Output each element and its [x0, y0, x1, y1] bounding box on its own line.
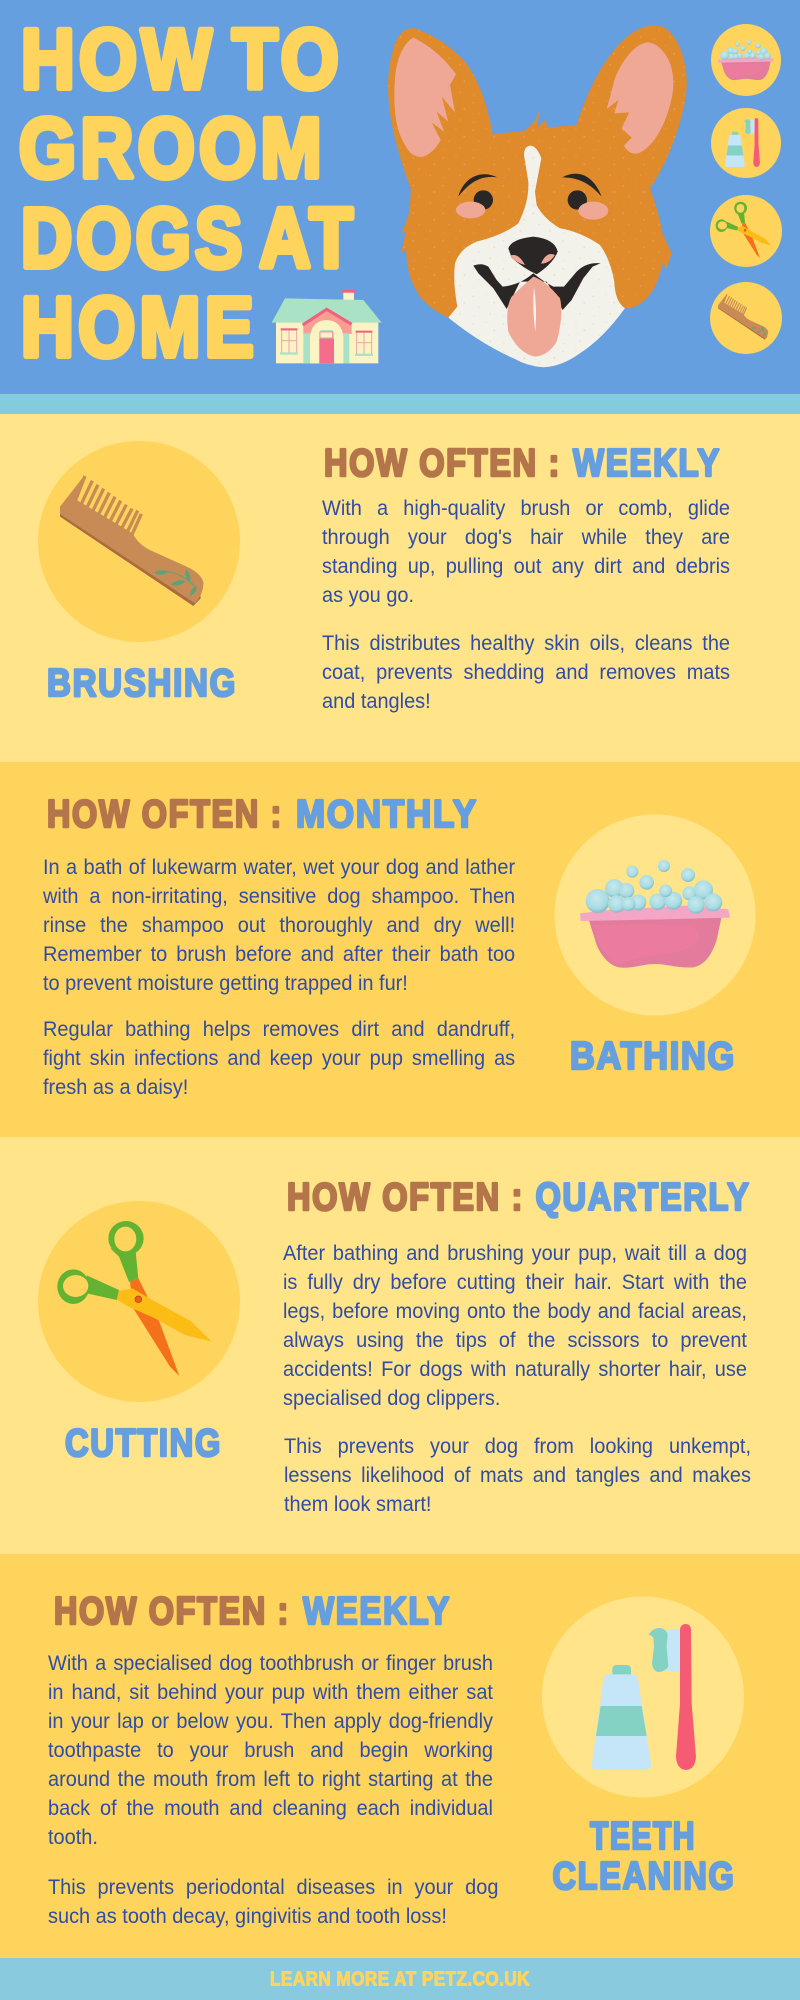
text: brushing body: standing up, pulling out any dirt and debris: [322, 555, 730, 578]
text: cutting body: This prevents your dog from looking unkempt,: [284, 1435, 751, 1458]
heading: how often monthly: MONTHLY: [296, 793, 478, 836]
text: brushing body: This distributes healthy skin oils, cleans the: [322, 632, 730, 655]
header panel: [0, 0, 800, 395]
icon: house: [272, 290, 382, 363]
text: cutting body: [283, 1239, 777, 1522]
text: cutting body: is fully dry before cutting their hair. Start with the: [283, 1271, 747, 1294]
text: brushing body: and tangles!: [322, 690, 430, 713]
panel: brushing: [0, 414, 800, 762]
text: bathing body: fight skin infections and keep your pup smelling as: [42, 1047, 515, 1070]
dog nose: [508, 237, 558, 274]
label: teeth cleaning: TEETH: [590, 1815, 696, 1858]
heading: how often monthly: [47, 793, 478, 836]
text: teeth cleaning body: back of the mouth and cleaning each individual: [48, 1797, 493, 1820]
dog cheeks: [456, 202, 608, 220]
icon circle: toothpaste: [711, 108, 781, 178]
panel: cutting: [0, 1137, 800, 1554]
title: HOME: [21, 280, 258, 374]
dog eyes: [458, 174, 602, 210]
title: GROOM: [19, 101, 326, 195]
text: bathing body: fresh as a daisy!: [42, 1076, 188, 1099]
label: brushing: BRUSHING: [47, 662, 237, 705]
text: bathing body: with a non-irritating, sensitive dog shampoo. Then: [43, 885, 515, 908]
dog right inner ear: [607, 42, 673, 154]
panel: bathing: [0, 762, 800, 1137]
label: cutting: CUTTING: [65, 1422, 222, 1465]
text: teeth cleaning body: This prevents periodontal diseases in your dog: [48, 1876, 498, 1899]
text: teeth cleaning body: such as tooth decay, gingivitis and tooth loss!: [48, 1905, 447, 1928]
heading: how often quarterly: [287, 1176, 750, 1219]
dog tongue: [507, 277, 561, 357]
text: bathing body: In a bath of lukewarm water, wet your dog and lather: [43, 856, 515, 879]
text: brushing body: through your dog's hair while they are: [322, 526, 730, 549]
circle icon: scissors: [38, 1201, 240, 1402]
heading: how often weekly: WEEKLY: [573, 442, 721, 485]
text: teeth cleaning body: [48, 1649, 524, 1933]
text: teeth cleaning body: around the mouth from left to right starting at the: [48, 1768, 493, 1791]
dog mouth: [473, 263, 601, 310]
text: teeth cleaning body: With a specialised dog toothbrush or finger brush: [48, 1652, 493, 1675]
dog left inner ear: [394, 38, 456, 157]
text: cutting body: always using the tips of the scissors to prevent: [283, 1329, 747, 1352]
title: HOW TO: [21, 12, 343, 106]
text: bathing body: rinse the shampoo out thoroughly and dry well!: [43, 914, 515, 937]
heading: how often weekly: WEEKLY: [303, 1590, 451, 1633]
text: cutting body: legs, before moving onto the body and facial areas,: [283, 1300, 747, 1323]
text: teeth cleaning body: in hand, sit behind your pup with them either sat: [48, 1681, 493, 1704]
footer: [0, 1958, 800, 2000]
icon: corgi dog face: [388, 25, 687, 367]
text: cutting body: specialised dog clippers.: [283, 1387, 500, 1410]
text: cutting body: lessens likelihood of mats and tangles and makes: [284, 1464, 751, 1487]
circle icon: bath: [554, 814, 756, 1016]
text: bathing body: [42, 853, 543, 1105]
text: bathing body: Remember to brush before and after their bath too: [43, 943, 515, 966]
title: [19, 12, 357, 374]
text: bathing body: Regular bathing helps removes dirt and dandruff,: [42, 1018, 515, 1041]
text: teeth cleaning body: toothpaste to your brush and begin working: [48, 1739, 493, 1762]
text: brushing body: coat, prevents shedding and removes mats: [322, 661, 730, 684]
heading: how often quarterly: HOW OFTEN :: [287, 1176, 524, 1219]
text: brushing body: [322, 494, 752, 719]
heading: how often monthly: HOW OFTEN :: [47, 793, 283, 836]
title: DOGS AT: [21, 191, 357, 285]
heading: how often weekly: HOW OFTEN :: [54, 1590, 290, 1633]
icon circle: bath: [711, 24, 781, 96]
text: brushing body: as you go.: [322, 584, 414, 607]
label: teeth cleaning: [552, 1815, 736, 1898]
circle icon: toothpaste and toothbrush: [542, 1596, 744, 1798]
heading: how often quarterly: QUARTERLY: [536, 1176, 750, 1219]
text: cutting body: After bathing and brushing your pup, wait till a dog: [283, 1242, 747, 1265]
label: bathing: BATHING: [570, 1035, 736, 1078]
panel: teeth cleaning: [0, 1554, 800, 1958]
icon circle: scissors: [710, 195, 782, 267]
label: teeth cleaning: CLEANING: [552, 1855, 736, 1898]
text: bathing body: to prevent moisture getting trapped in fur!: [43, 972, 408, 995]
text: teeth cleaning body: tooth.: [48, 1826, 98, 1849]
footer text: LEARN MORE AT PETZ.CO.UK: [270, 1968, 530, 1990]
text: teeth cleaning body: in your lap or below you. Then apply dog-friendly: [48, 1710, 493, 1733]
circle icon: comb: [38, 441, 240, 642]
text: brushing body: With a high-quality brush or comb, glide: [322, 497, 730, 520]
heading: how often weekly: HOW OFTEN :: [324, 442, 561, 485]
text: cutting body: accidents! For dogs with naturally shorter hair, use: [283, 1358, 747, 1381]
icon circle: comb: [710, 282, 782, 354]
text: cutting body: them look smart!: [284, 1493, 431, 1516]
